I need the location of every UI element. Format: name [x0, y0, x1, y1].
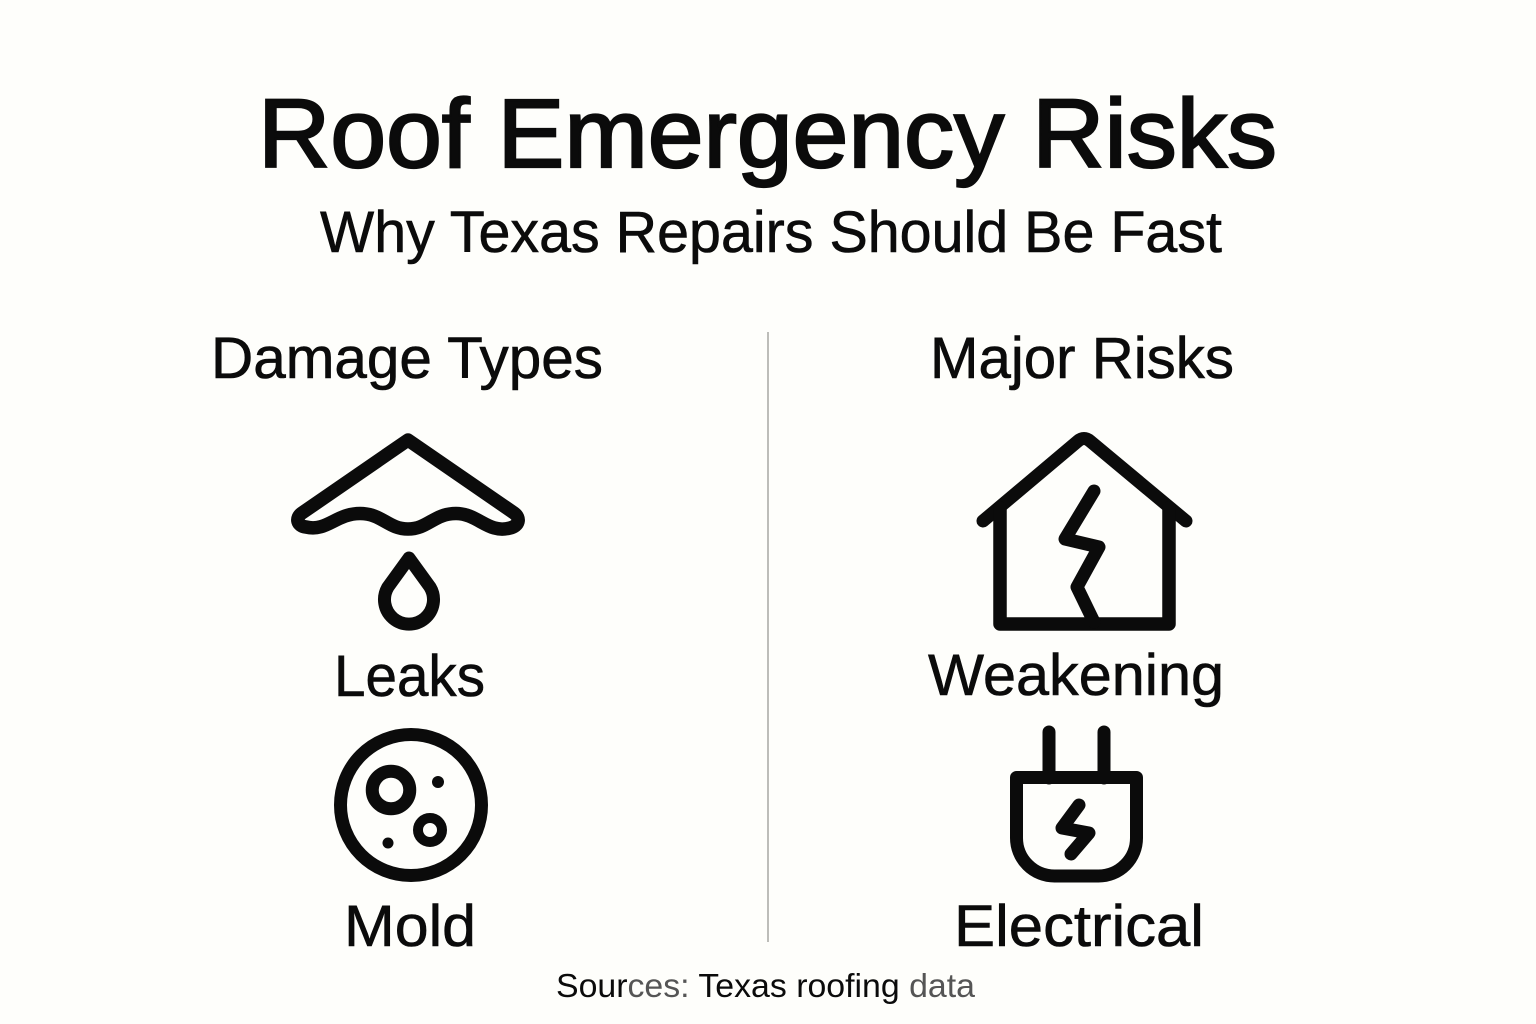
icon: leaking roof with water drop — [298, 440, 518, 624]
source note: Sources: Texas roofing data — [556, 967, 976, 1004]
icon: mold circle — [340, 734, 482, 876]
panel: damage types — [211, 326, 603, 959]
label: weakening: Weakening — [928, 643, 1224, 708]
icon: electrical plug with bolt — [1016, 732, 1136, 876]
title: Roof Emergency Risks — [258, 79, 1277, 188]
subtitle: Why Texas Repairs Should Be Fast — [320, 200, 1222, 265]
panel: major risks — [928, 326, 1234, 959]
label: mold: Mold — [344, 894, 476, 959]
heading: major risks: Major Risks — [930, 326, 1234, 391]
heading: damage types: Damage Types — [211, 326, 603, 391]
label: electrical: Electrical — [954, 894, 1204, 959]
label: leaks: Leaks — [334, 644, 485, 709]
icon: cracked house — [983, 438, 1186, 624]
